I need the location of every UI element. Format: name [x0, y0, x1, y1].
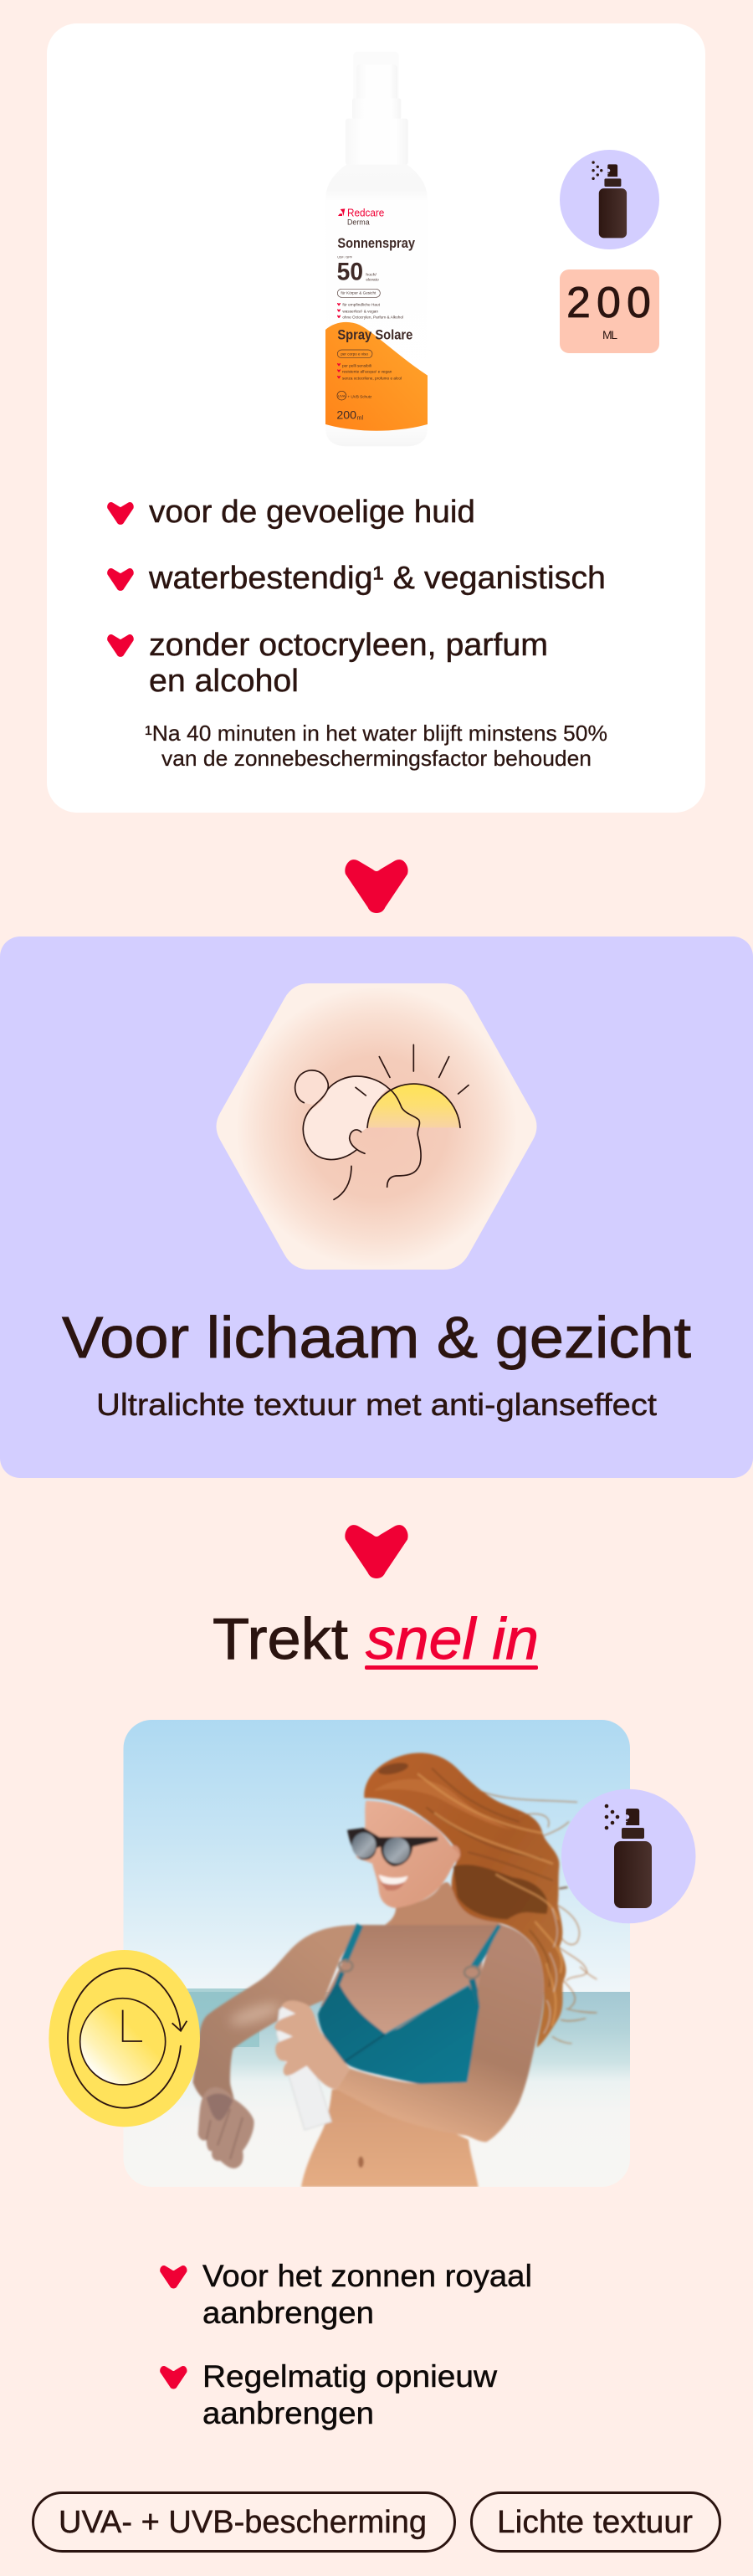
tip text: Regelmatig opnieuw [202, 2359, 497, 2394]
product bottle: USF / SPF [337, 255, 353, 259]
tip text [202, 2259, 532, 2330]
icon: heart bullet [160, 2366, 187, 2389]
footnote: van de zonnebeschermingsfactor behouden [161, 746, 592, 771]
product bottle: per corpo e viso [341, 352, 368, 356]
product bottle: resistente all'acqua¹ e vegan [342, 370, 392, 375]
tip text: Voor het zonnen royaal [202, 2259, 532, 2293]
icon: clock badge [49, 1950, 200, 2127]
benefit text: voor de gevoelige huid [149, 495, 475, 530]
subheading: Ultralichte textuur met anti-glanseffect [96, 1388, 658, 1422]
hexagon badge [216, 983, 537, 1270]
tip text [202, 2359, 497, 2430]
product bottle: Sonnenspray [337, 235, 416, 251]
product bottle: per pelli sensibili [342, 363, 371, 368]
product bottle [325, 52, 428, 446]
icon: heart bullet [107, 568, 134, 591]
footnote [145, 721, 607, 771]
application tips list [160, 2259, 532, 2430]
product bottle: Spray Solare [337, 327, 412, 343]
footnote: ¹Na 40 minuten in het water blijft minstens 50% [145, 721, 607, 746]
icon: heart bullet [107, 634, 134, 657]
product bottle: 200 [336, 408, 356, 421]
icon: face with sun [295, 1044, 469, 1199]
benefit text: zonder octocryleen, parfum [149, 628, 548, 663]
pill: UV protection: UVA- + UVB-bescherming [59, 2505, 427, 2540]
product bottle: für Körper & Gesicht [341, 291, 376, 295]
heading: absorbs quickly [213, 1606, 539, 1671]
badge: 200 ml [560, 269, 659, 353]
heading: absorbs quickly: Trekt [213, 1606, 348, 1671]
product bottle: hoch/ [366, 273, 377, 277]
icon: heart bullet [107, 502, 134, 525]
product bottle: Redcare [347, 207, 384, 218]
product bottle: für empfindliche Haut [342, 303, 381, 308]
product bottle: senza octocrilene, profumo e alcol [342, 376, 402, 381]
product bottle: wasserfest¹ & vegan [342, 310, 378, 315]
badge: 200 ml: 200 [566, 279, 651, 327]
panel: product card [47, 23, 705, 813]
product bottle: elevato [366, 278, 379, 282]
tip text: aanbrengen [202, 2396, 374, 2430]
tip text: aanbrengen [202, 2296, 374, 2330]
product bottle: 50 [337, 259, 363, 286]
benefit list [107, 495, 606, 699]
pill: light texture: Lichte textuur [497, 2505, 693, 2540]
benefit text: en alcohol [149, 664, 299, 699]
icon: heart divider [345, 860, 408, 913]
photo: woman applying sun spray on beach [123, 1720, 631, 2187]
panel: body and face [0, 936, 753, 1478]
product bottle: + UVB Schutz [347, 395, 372, 400]
product bottle: ml [357, 413, 363, 421]
product bottle: ohne Octocrylen, Parfum & Alkohol [342, 316, 403, 321]
product bottle: Derma [347, 218, 370, 227]
icon: heart bullet [160, 2266, 187, 2289]
pill: light texture [472, 2492, 720, 2551]
icon: spray bottle [560, 150, 659, 249]
benefit text [149, 628, 548, 699]
icon: heart divider [345, 1525, 408, 1578]
pill: UV protection [33, 2492, 455, 2551]
heading: absorbs quickly: snel in [366, 1606, 539, 1671]
icon: spray badge [561, 1789, 696, 1923]
heading: Voor lichaam & gezicht [62, 1305, 691, 1370]
badge: 200 ml: ML [602, 328, 617, 341]
benefit text: waterbestendig¹ & veganistisch [148, 561, 606, 596]
product bottle: UVA [338, 393, 346, 398]
